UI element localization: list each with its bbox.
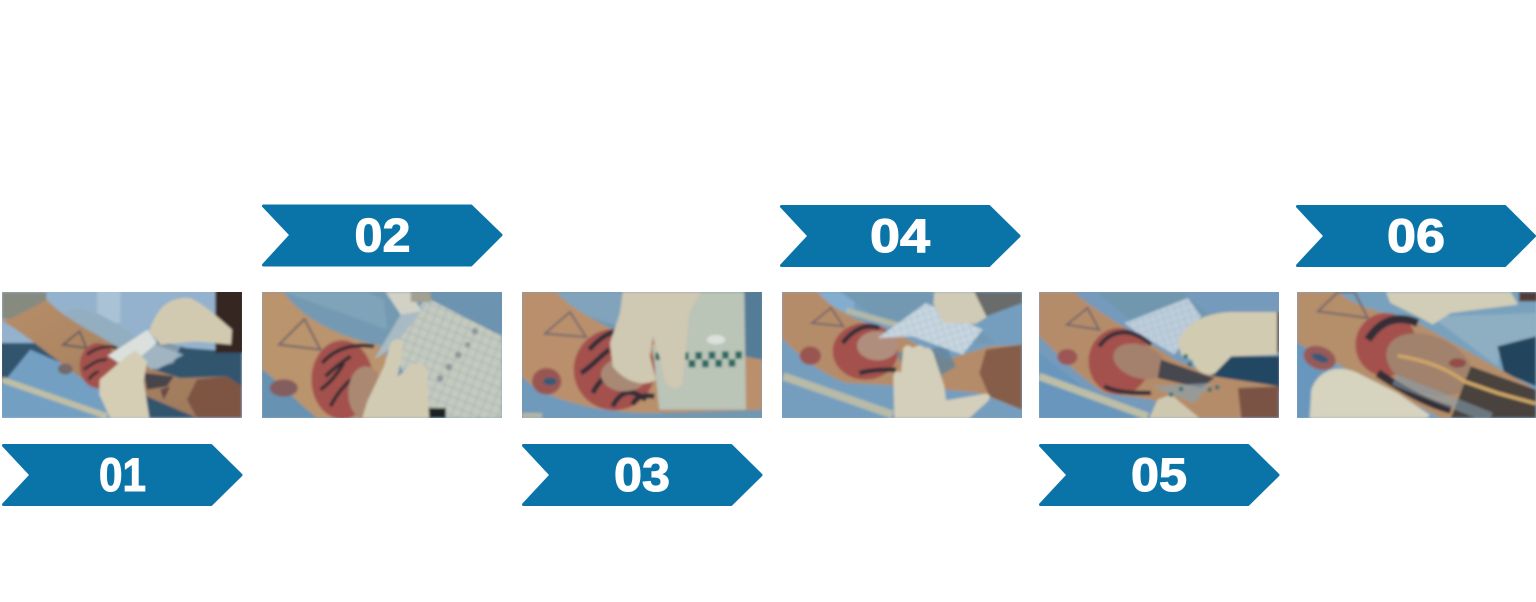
chevron 02: [264, 206, 501, 265]
step 04 photo: [782, 292, 1022, 418]
chevron 03: [524, 446, 761, 504]
chevron 06: [1298, 206, 1534, 266]
chevron 03: 03: [614, 448, 670, 501]
chevron 01: 01: [99, 448, 146, 501]
step 01 photo: [2, 292, 242, 418]
step 03 photo: [522, 292, 762, 418]
step 05 photo: [1039, 292, 1279, 418]
step 06 photo: [1297, 292, 1536, 418]
chevron 05: [1040, 446, 1278, 504]
chevron 04: 04: [870, 209, 930, 262]
chevron 06: 06: [1387, 209, 1445, 262]
chevron 04: [782, 206, 1019, 266]
chevron 01: [4, 446, 241, 504]
chevron 02: 02: [354, 208, 410, 262]
chevron 05: 05: [1131, 448, 1187, 501]
step 02 photo: [262, 292, 502, 418]
